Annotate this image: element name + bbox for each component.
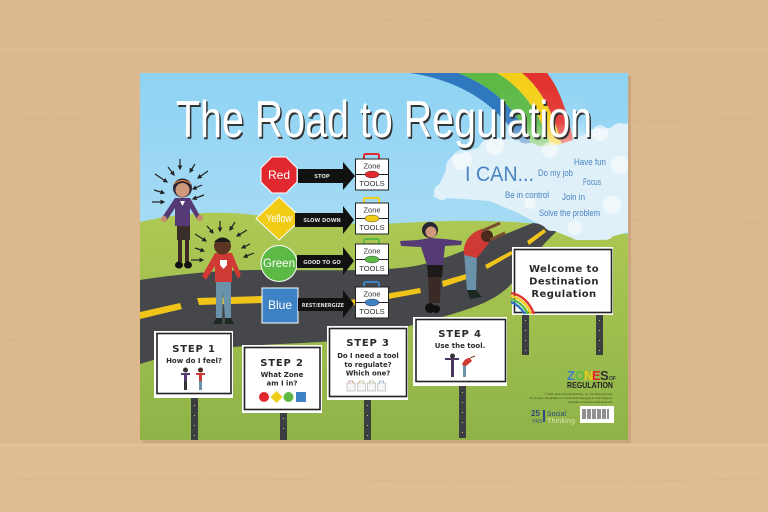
step 3 sign: STEP 3 (346, 338, 390, 349)
road (140, 223, 562, 364)
social thinking logo (531, 409, 575, 425)
poster (140, 73, 631, 443)
road lane markings (140, 229, 546, 319)
step 4 sign: STEP 4 (438, 329, 482, 340)
I can list: I CAN... (465, 163, 534, 186)
step 4 sign: Use the tool. (435, 342, 485, 350)
step 3 sign: Which one? (346, 370, 390, 378)
I can list: Be in control (505, 190, 549, 200)
step 2 sign: What Zone (261, 371, 304, 379)
zone row: blue: REST/ENERGIZE (302, 303, 344, 309)
step 4 sign (413, 317, 507, 386)
zones of regulation logo: REGULATION (567, 380, 613, 390)
social thinking logo: 25 (531, 409, 540, 418)
grass hills (140, 213, 628, 440)
welcome sign: Welcome to (529, 264, 599, 275)
zones of regulation logo (567, 368, 616, 390)
step 1 sign: How do I feel? (166, 357, 222, 365)
welcome sign: Regulation (531, 289, 597, 300)
step 2 sign: STEP 2 (260, 358, 304, 369)
step 2 sign: am I in? (267, 380, 297, 388)
zone row: red (261, 154, 388, 193)
I can list: Join in (562, 192, 585, 202)
social thinking logo: Thinking (547, 418, 575, 425)
zone row: blue: Blue (268, 298, 292, 312)
person 2 with stress arrows (191, 221, 254, 324)
step 3 sign (327, 326, 408, 400)
step 1 sign (154, 331, 233, 398)
zone row: blue (262, 282, 388, 323)
welcome sign: Destination (529, 276, 599, 288)
person 4 stretching (464, 223, 505, 299)
title: The Road to Regulation (176, 91, 592, 149)
step 1 sign: STEP 1 (172, 344, 216, 355)
mini rainbow (511, 293, 534, 314)
sign posts (191, 313, 603, 440)
copyright text: Available at www.socialthinking.com (568, 400, 614, 404)
cloud (433, 123, 630, 240)
copyright text: © 2021 Think Social Publishing, Inc. All rights reserved. (544, 392, 613, 396)
I can list (465, 157, 606, 218)
I can list: Solve the problem (539, 208, 600, 218)
zone row: green: Green (263, 258, 295, 270)
copyright text (529, 392, 614, 404)
zone row: green (261, 239, 388, 282)
person 1 with stress arrows (152, 159, 208, 268)
zone row: yellow: SLOW DOWN (303, 218, 341, 224)
zones of regulation logo: N (584, 368, 593, 383)
social thinking logo: Social (547, 411, 567, 418)
step 3 sign: Do I need a tool (337, 352, 399, 360)
zones of regulation logo: OF (609, 376, 616, 382)
zone row: yellow: Yellow (266, 213, 292, 225)
person 3 arms out (400, 222, 462, 313)
step 4 people icon (445, 354, 475, 377)
zones of regulation logo: S (600, 368, 609, 383)
welcome sign (511, 247, 613, 315)
mini toolboxes (347, 381, 386, 391)
copyright text: The Zones of Regulation is a trademark belonging to Leah Kuypers. (529, 396, 613, 400)
zone row: red: STOP (314, 174, 330, 180)
rainbow (410, 73, 585, 151)
I can list: Focus (583, 177, 601, 188)
zone row: red: Red (268, 168, 290, 182)
zone row: yellow (256, 197, 388, 240)
I can list: Do my job (538, 168, 573, 178)
social thinking logo: YRS (532, 419, 543, 425)
zones of regulation logo: Z (567, 368, 575, 383)
I can list: Have fun (574, 157, 606, 168)
zone row: green: GOOD TO GO (303, 260, 341, 266)
zone colour shapes (259, 391, 306, 403)
step 2 sign (242, 345, 322, 413)
barcode (580, 406, 614, 423)
zones of regulation logo: E (592, 368, 601, 383)
zones of regulation logo: O (575, 368, 585, 383)
step 1 people icon (181, 368, 205, 390)
step 3 sign: to regulate? (344, 361, 392, 369)
title: The Road to Regulation (178, 93, 594, 151)
